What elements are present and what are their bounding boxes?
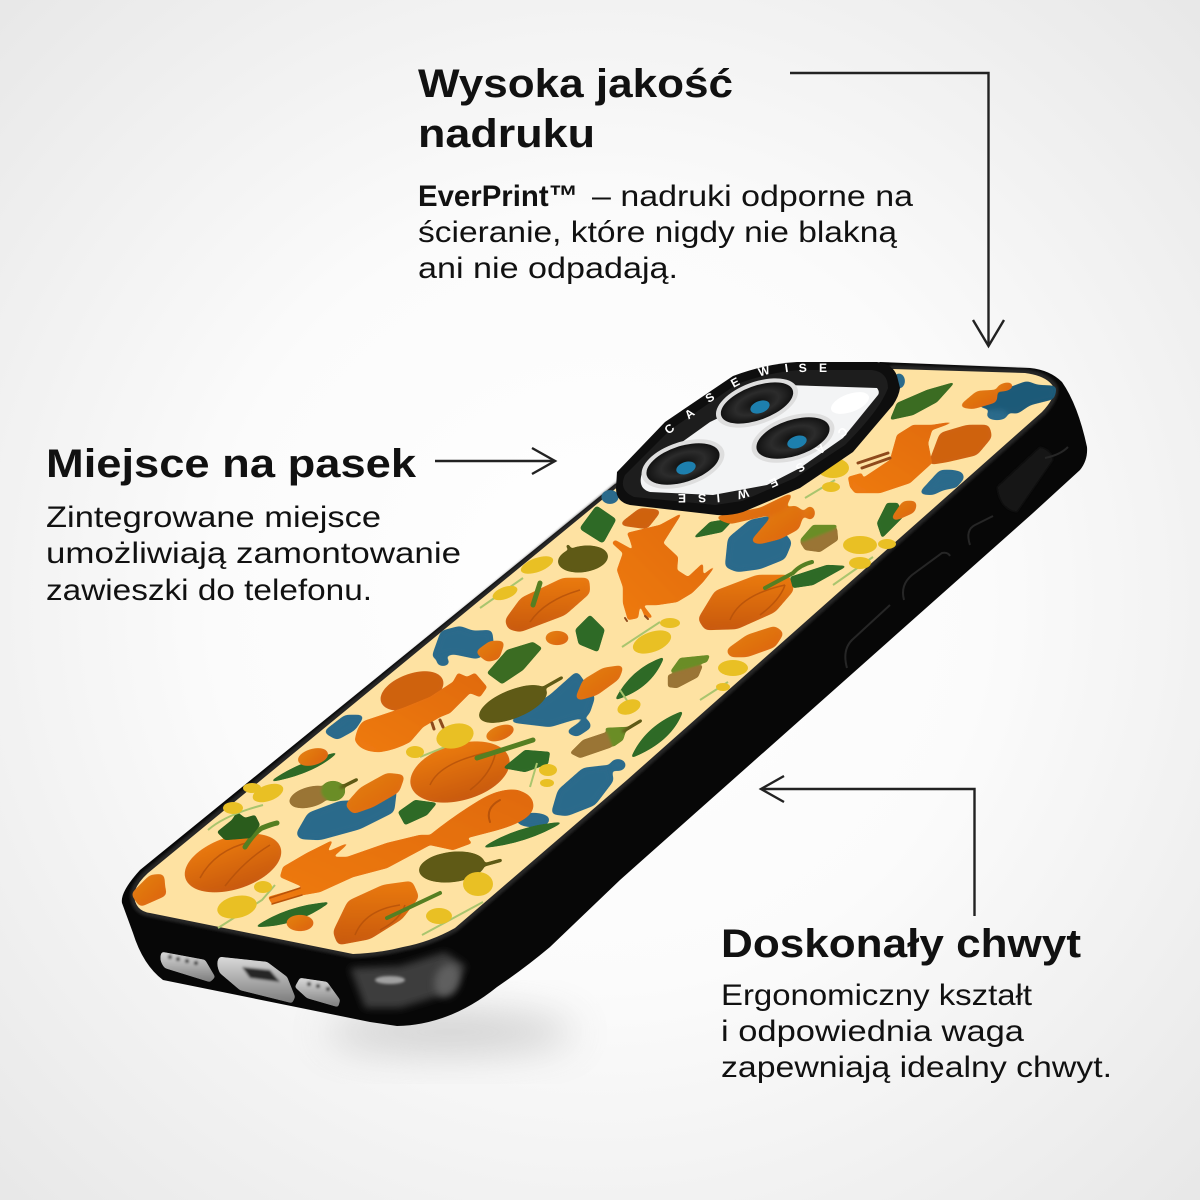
ring lettering: A <box>682 405 698 422</box>
pattern: blue blobs <box>296 373 1057 840</box>
squirrel middle <box>355 673 487 752</box>
ring lettering: C <box>834 424 850 440</box>
pattern: squirrel details <box>270 453 890 904</box>
arrow: print quality <box>790 73 1004 346</box>
camera ring <box>616 362 900 515</box>
text block: EverPrint <box>418 180 913 285</box>
ring lettering: S <box>698 491 706 505</box>
ring lettering: I <box>716 491 721 505</box>
ring lettering: E <box>678 491 686 505</box>
text block: strap slot: zawieszki do telefonu. <box>46 574 372 607</box>
ring lettering: C <box>662 421 678 437</box>
phone shadow <box>325 1012 575 1052</box>
ring lettering: E <box>819 361 827 375</box>
lens left <box>635 430 731 498</box>
ring lettering: S <box>793 459 807 475</box>
text block: grip <box>721 979 1112 1084</box>
ring lettering: E <box>728 374 742 391</box>
text block: EverPrint: ścieranie, które nigdy nie blakną <box>418 216 897 249</box>
text block: strap slot: umożliwiają zamontowanie <box>46 537 461 570</box>
heading: Wysoka jakość nadruku: nadruku <box>418 112 595 156</box>
pattern: pumpkin stems <box>245 562 812 918</box>
text block: strap slot: Zintegrowane miejsce <box>46 501 381 534</box>
squirrel top right <box>848 421 957 493</box>
ring lettering <box>662 361 850 505</box>
pattern: pumpkins <box>177 575 794 945</box>
camera glass <box>641 385 879 495</box>
ring lettering: E <box>767 475 780 491</box>
ring lettering: W <box>757 363 772 379</box>
text block: grip: Ergonomiczny kształt <box>721 979 1033 1012</box>
lens top <box>709 369 805 437</box>
pattern: squirrel tails <box>375 425 992 718</box>
text block: EverPrint: ani nie odpadają. <box>418 252 678 285</box>
pattern: pumpkin ribs <box>200 585 785 935</box>
ring lettering: I <box>784 361 789 375</box>
pattern: squirrels <box>268 421 957 904</box>
strap slot pad <box>997 447 1053 512</box>
camera island <box>616 361 900 515</box>
port: left speaker <box>161 952 215 982</box>
ring lettering: W <box>735 486 750 502</box>
port: right speaker <box>295 978 340 1007</box>
ring lettering: S <box>703 390 717 406</box>
text block: EverPrint: – nadruki odporne na <box>592 180 913 213</box>
text block: strap slot <box>46 501 461 607</box>
port: charging <box>218 957 295 1003</box>
case body <box>122 362 1087 1026</box>
squirrel under camera <box>612 513 717 620</box>
text block: grip: i odpowiednia waga <box>721 1015 1024 1048</box>
arrow: strap slot <box>435 448 555 474</box>
pattern: yellow flowers <box>208 458 896 935</box>
pattern: orange blobs <box>131 381 1015 931</box>
heading: Miejsce na pasek: Miejsce na pasek <box>46 442 417 486</box>
rim around back panel <box>134 369 1054 954</box>
printed back panel <box>134 369 1054 954</box>
heading: Wysoka jakość nadruku <box>418 62 733 156</box>
phone case <box>46 62 1112 1084</box>
ring lettering: S <box>798 361 807 375</box>
bottom corner highlight <box>350 952 466 1008</box>
squirrel bottom <box>268 790 533 904</box>
pattern: acorns and cones <box>287 525 838 886</box>
heading: Wysoka jakość nadruku: Wysoka jakość <box>418 62 733 106</box>
pattern: leaves <box>217 382 955 927</box>
flash <box>828 388 872 418</box>
side buttons <box>845 447 1068 668</box>
arrow: grip <box>761 776 974 916</box>
text block: EverPrint: EverPrint™ <box>418 180 578 213</box>
camera ring top face <box>623 370 888 505</box>
lens right <box>745 404 841 472</box>
heading: Doskonały chwyt: Doskonały chwyt <box>721 922 1081 966</box>
ring lettering: A <box>812 441 828 458</box>
text block: grip: zapewniają idealny chwyt. <box>721 1051 1112 1084</box>
